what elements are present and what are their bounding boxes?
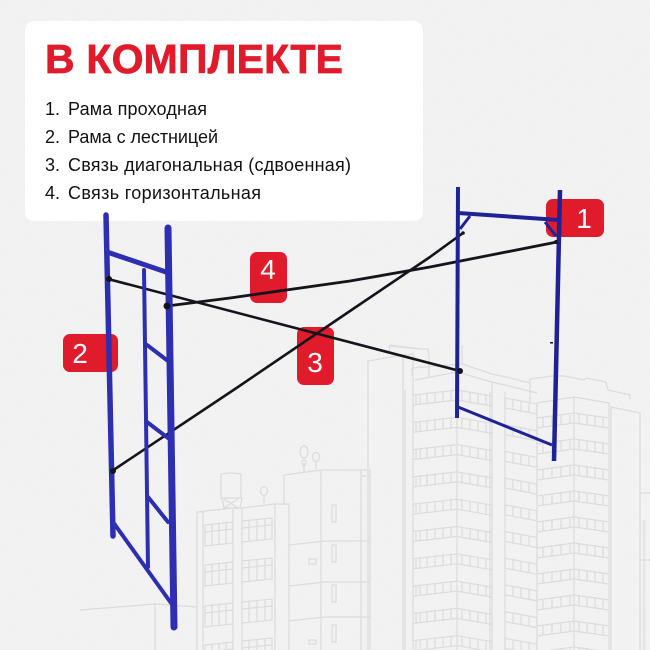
building A outline bbox=[197, 504, 289, 650]
water tower bbox=[221, 473, 242, 508]
badge 1: 1 bbox=[576, 203, 592, 234]
list item 1: Рама проходная bbox=[68, 99, 207, 119]
passage top bar bbox=[458, 213, 559, 220]
badge 3: 3 bbox=[307, 347, 323, 378]
low building bottom left bbox=[80, 604, 197, 650]
building A windows bbox=[205, 518, 272, 650]
tower C windows bbox=[413, 390, 492, 650]
diagonal braces (black) bbox=[108, 233, 557, 471]
tower E windows bbox=[537, 413, 609, 650]
badge 2 bbox=[63, 334, 118, 372]
badge 4: 4 bbox=[260, 254, 276, 285]
antenna on building A bbox=[260, 486, 268, 503]
background: city buildings line drawing bbox=[80, 345, 650, 650]
right slab and neighbouring building bbox=[611, 407, 650, 650]
tower D windows bbox=[505, 398, 537, 650]
passage frame (right) bbox=[457, 187, 560, 461]
heading: В КОМПЛЕКТЕ bbox=[45, 36, 343, 82]
badge 2: 2 bbox=[72, 338, 88, 369]
tower E body bbox=[537, 397, 609, 650]
badge 3 bbox=[297, 327, 334, 385]
badge 4 bbox=[250, 252, 287, 303]
building B bbox=[284, 470, 370, 650]
tower C body bbox=[413, 380, 505, 650]
ladder rungs bbox=[147, 345, 168, 522]
ladder right post bbox=[168, 228, 174, 627]
tower roof bbox=[389, 345, 630, 650]
brace: diagonal falling bbox=[108, 279, 460, 371]
panel: contents card bbox=[25, 21, 423, 221]
list item 2: Рама с лестницей bbox=[68, 127, 218, 147]
brace: diagonal rising bbox=[112, 233, 463, 471]
list item 4: 4. bbox=[45, 183, 60, 203]
ladder top bar bbox=[107, 252, 166, 272]
ladder bottom diagonal bbox=[113, 522, 171, 603]
list item 3: Связь диагональная (сдвоенная) bbox=[68, 155, 351, 175]
passage right post bbox=[554, 190, 560, 461]
passage corner braces bbox=[460, 216, 556, 236]
list item 2: 2. bbox=[45, 127, 60, 147]
passage bottom bar bbox=[458, 407, 552, 445]
passage left post bbox=[457, 187, 458, 418]
left slab of tower bbox=[361, 354, 413, 650]
building B small windows bbox=[309, 559, 316, 644]
ladder middle post bbox=[144, 270, 148, 567]
list item 3: 3. bbox=[45, 155, 60, 175]
ladder frame (left) bbox=[106, 215, 174, 627]
brace: horizontal bbox=[167, 242, 557, 306]
badge 1 bbox=[546, 199, 604, 237]
building B antennas bbox=[300, 446, 320, 472]
ladder left post bbox=[106, 215, 113, 536]
list item 4: Связь горизонтальная bbox=[68, 183, 261, 203]
brace connectors bbox=[106, 231, 558, 474]
list item 1: 1. bbox=[45, 99, 60, 119]
